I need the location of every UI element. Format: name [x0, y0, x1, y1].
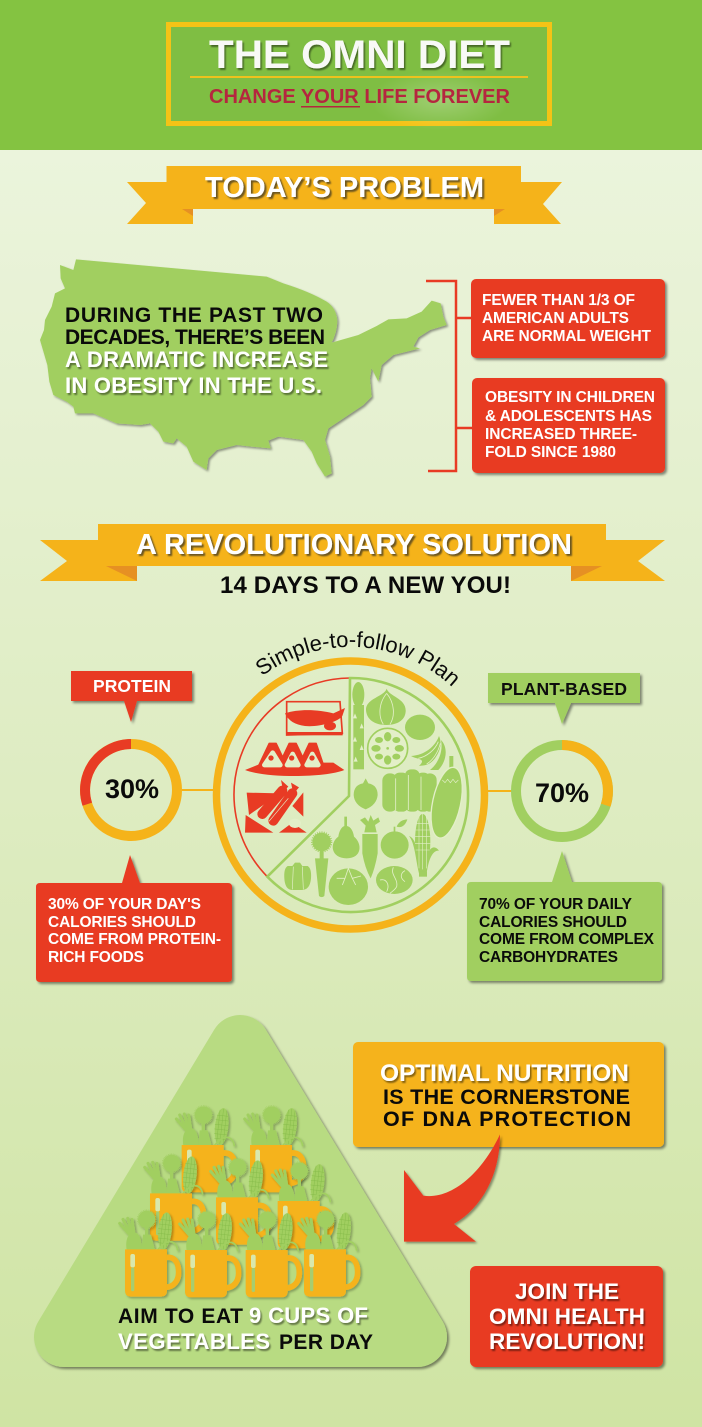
arrow: [404, 1134, 500, 1242]
donut: 70%: 70%: [535, 778, 589, 808]
map statement text: DURING THE PAST TWO: [65, 304, 323, 327]
join the revolution box: REVOLUTION!: [489, 1329, 645, 1354]
protein description: [36, 855, 232, 982]
bracket connector: [426, 281, 472, 471]
optimal nutrition box: [353, 1042, 664, 1147]
nine cups text: 9 CUPS OF: [249, 1303, 368, 1328]
protein flag: [71, 671, 192, 722]
protein foods: [245, 702, 345, 833]
nine cups text: [118, 1303, 373, 1354]
callout: childhood obesity: OBESITY IN CHILDREN: [485, 389, 655, 406]
title box: CHANGE YOUR LIFE FOREVER: [209, 86, 511, 108]
join the revolution box: [470, 1266, 663, 1367]
protein description: 30% OF YOUR DAY'S: [48, 896, 201, 913]
nine cups text: VEGETABLES: [118, 1329, 270, 1354]
optimal nutrition box: IS THE CORNERSTONE: [383, 1085, 630, 1109]
callout: normal weight: ARE NORMAL WEIGHT: [482, 328, 652, 345]
optimal nutrition box: OPTIMAL NUTRITION: [380, 1060, 629, 1087]
cups of vegetables: [120, 1106, 358, 1297]
ribbon: a revolutionary solution: A REVOLUTIONARY SOLUTION: [136, 529, 572, 561]
title box: THE OMNI DIET: [209, 33, 510, 77]
map statement text: IN OBESITY IN THE U.S.: [65, 373, 322, 398]
subheading: 14 DAYS TO A NEW YOU!: [220, 572, 511, 599]
ribbon: today's problem: TODAY’S PROBLEM: [205, 172, 484, 204]
plant-based description: 70% OF YOUR DAILY: [479, 896, 633, 913]
nine cups text: PER DAY: [279, 1331, 373, 1354]
plant-based description: COME FROM COMPLEX: [479, 931, 655, 948]
map statement text: DECADES, THERE’S BEEN: [65, 326, 325, 349]
callout: childhood obesity: INCREASED THREE-: [485, 426, 637, 443]
plant-based description: CARBOHYDRATES: [479, 949, 618, 966]
protein description: COME FROM PROTEIN-: [48, 931, 221, 948]
ribbon: a revolutionary solution: [40, 524, 665, 581]
map statement text: [65, 304, 328, 398]
plant-based flag: PLANT-BASED: [501, 679, 627, 699]
ribbon: today's problem: [127, 166, 562, 224]
donut: 30%: 30%: [105, 774, 159, 804]
header band: [0, 0, 702, 150]
triangle panel: [64, 1045, 417, 1337]
plant-based flag: [488, 673, 640, 724]
map of the U.S.: [40, 259, 447, 477]
curved plan label: Simple-to-follow Plan: [256, 631, 458, 686]
title box: [168, 24, 550, 130]
connector lines: [182, 790, 512, 791]
plant-based foods: [284, 682, 468, 905]
protein description: RICH FOODS: [48, 949, 144, 966]
plate: [216, 661, 484, 929]
protein description: CALORIES SHOULD: [48, 914, 196, 931]
plant-based description: CALORIES SHOULD: [479, 914, 627, 931]
donut: 30%: [85, 744, 177, 836]
callout: normal weight: AMERICAN ADULTS: [482, 310, 629, 327]
callout: childhood obesity: FOLD SINCE 1980: [485, 444, 616, 461]
callout: normal weight: FEWER THAN 1/3 OF: [482, 292, 635, 309]
callout: normal weight: [471, 279, 665, 358]
map statement text: A DRAMATIC INCREASE: [65, 347, 328, 372]
nine cups text: AIM TO EAT: [118, 1305, 243, 1328]
donut: 70%: [516, 745, 608, 837]
join the revolution box: OMNI HEALTH: [489, 1304, 645, 1329]
plant-based description: [467, 851, 662, 981]
protein flag: PROTEIN: [93, 676, 171, 696]
join the revolution box: JOIN THE: [515, 1279, 619, 1304]
callout: childhood obesity: & ADOLESCENTS HAS: [485, 408, 652, 425]
optimal nutrition box: OF DNA PROTECTION: [383, 1107, 631, 1131]
callout: childhood obesity: [472, 378, 665, 473]
